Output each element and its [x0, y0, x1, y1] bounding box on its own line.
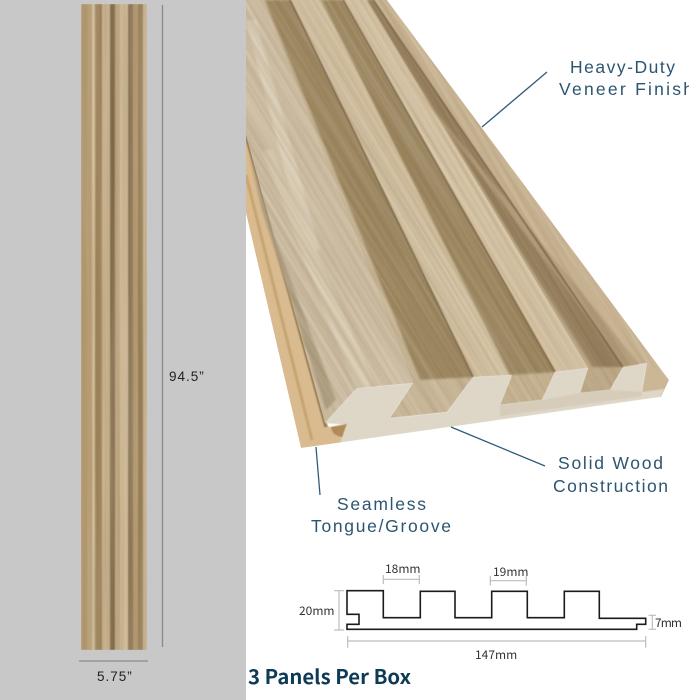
height dimension line	[162, 5, 164, 647]
channel shadows	[290, 0, 623, 377]
front view of wood panel	[81, 4, 147, 650]
ridge 1	[246, 0, 413, 423]
dimension: 20mm: 20mm	[299, 602, 335, 619]
dimension: 18mm: 18mm	[385, 560, 421, 577]
dimension: 7mm: 7mm	[655, 614, 682, 631]
label: seamless tongue groove: Tongue/Groove	[311, 516, 451, 536]
perspective wood panel	[246, 0, 669, 448]
leader line: solid wood	[451, 427, 545, 466]
ridge 3	[343, 0, 588, 372]
label: seamless tongue groove: Seamless	[337, 494, 426, 514]
label: heavy-duty veneer finish: Heavy-Duty	[570, 57, 675, 77]
label: heavy-duty veneer finish: Veneer Finish	[559, 79, 693, 99]
dimension marks	[334, 575, 656, 648]
profile diagram	[299, 560, 682, 663]
leader line: veneer finish	[482, 72, 547, 127]
tongue edge	[246, 125, 345, 448]
leader line: tongue groove	[316, 447, 320, 495]
label: solid wood construction: Construction	[553, 476, 668, 496]
dimension: 147mm: 147mm	[475, 646, 517, 663]
groove notch	[330, 424, 347, 438]
label: solid wood construction: Solid Wood	[558, 453, 663, 473]
wood grain bands	[246, 0, 640, 410]
label: heavy-duty veneer finish	[559, 61, 689, 95]
left gray background panel	[0, 0, 246, 700]
channel 2	[320, 0, 555, 405]
width label: 5.75”	[97, 669, 133, 684]
channel 3	[367, 0, 623, 393]
box quantity heading: 3 Panels Per Box	[248, 661, 411, 690]
ridge 4	[373, 0, 647, 367]
wood texture	[246, 0, 668, 421]
panel cross-section outline	[347, 591, 646, 629]
end grain face	[325, 363, 664, 443]
channel 1	[263, 0, 473, 418]
right lip	[383, 0, 669, 397]
ridge 2	[290, 0, 512, 377]
height label: 94.5”	[169, 369, 205, 384]
width dimension line	[79, 660, 148, 662]
dimension: 19mm: 19mm	[493, 563, 529, 580]
